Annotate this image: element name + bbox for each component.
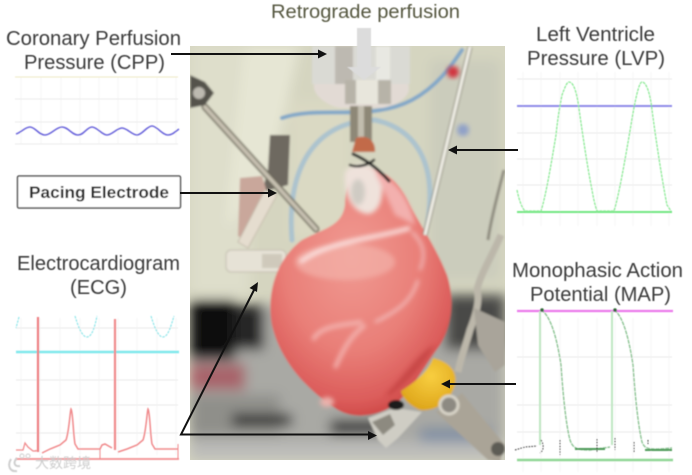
pressure needle	[425, 47, 504, 240]
label: Coronary Perfusion Pressure	[6, 28, 181, 74]
label: Left Ventricle Pressure: Left Ventricle	[536, 24, 655, 46]
label: Retrograde perfusion: Retrograde perfusion	[271, 2, 460, 23]
chart: ECG trace	[16, 316, 179, 459]
label: Left Ventricle Pressure	[527, 24, 665, 70]
arrows: ECG to electrodes	[181, 282, 377, 440]
pacing electrode label box	[18, 176, 180, 208]
dark clamp behind rod	[238, 135, 290, 240]
label: Electrocardiogram	[17, 253, 180, 299]
arrow: MAP to balloon	[441, 380, 516, 388]
photo: isolated perfused heart on apparatus	[185, 40, 510, 465]
yellow balloon	[401, 358, 456, 410]
chart: CPP trace	[15, 77, 179, 144]
label: Monophasic Action Potential: Potential (MAP)	[530, 284, 671, 306]
heart	[270, 164, 451, 416]
chart: MAP trace	[515, 308, 673, 472]
chart: LVP trace	[517, 72, 672, 226]
label: Monophasic Action Potential: Monophasic Action	[512, 260, 683, 282]
arrow: CPP to cannula	[171, 50, 327, 58]
arrow: LVP to needle	[448, 146, 518, 154]
cannula block	[312, 46, 410, 152]
label: Coronary Perfusion Pressure: Pressure (CPP)	[24, 52, 165, 74]
label: Electrocardiogram: (ECG)	[70, 277, 127, 299]
bottom holder	[368, 400, 422, 448]
watermark	[9, 454, 91, 471]
label: Electrocardiogram: Electrocardiogram	[17, 253, 180, 275]
label: Coronary Perfusion Pressure: Coronary Perfusion	[6, 28, 181, 50]
watermark: 大数跨境	[35, 455, 91, 471]
arrow: pacing electrode to rod	[180, 188, 277, 198]
pacing rod	[190, 75, 316, 229]
label: Monophasic Action Potential	[512, 260, 683, 306]
plastic pacing electrode holder	[226, 190, 286, 272]
right metal probe	[436, 235, 505, 462]
thread tie	[350, 154, 389, 181]
blue tubing	[282, 50, 469, 240]
pacing electrode label box: Pacing Electrode	[29, 184, 169, 202]
label: Left Ventricle Pressure: Pressure (LVP)	[527, 48, 665, 70]
retrograde perfusion arrow	[347, 28, 381, 80]
